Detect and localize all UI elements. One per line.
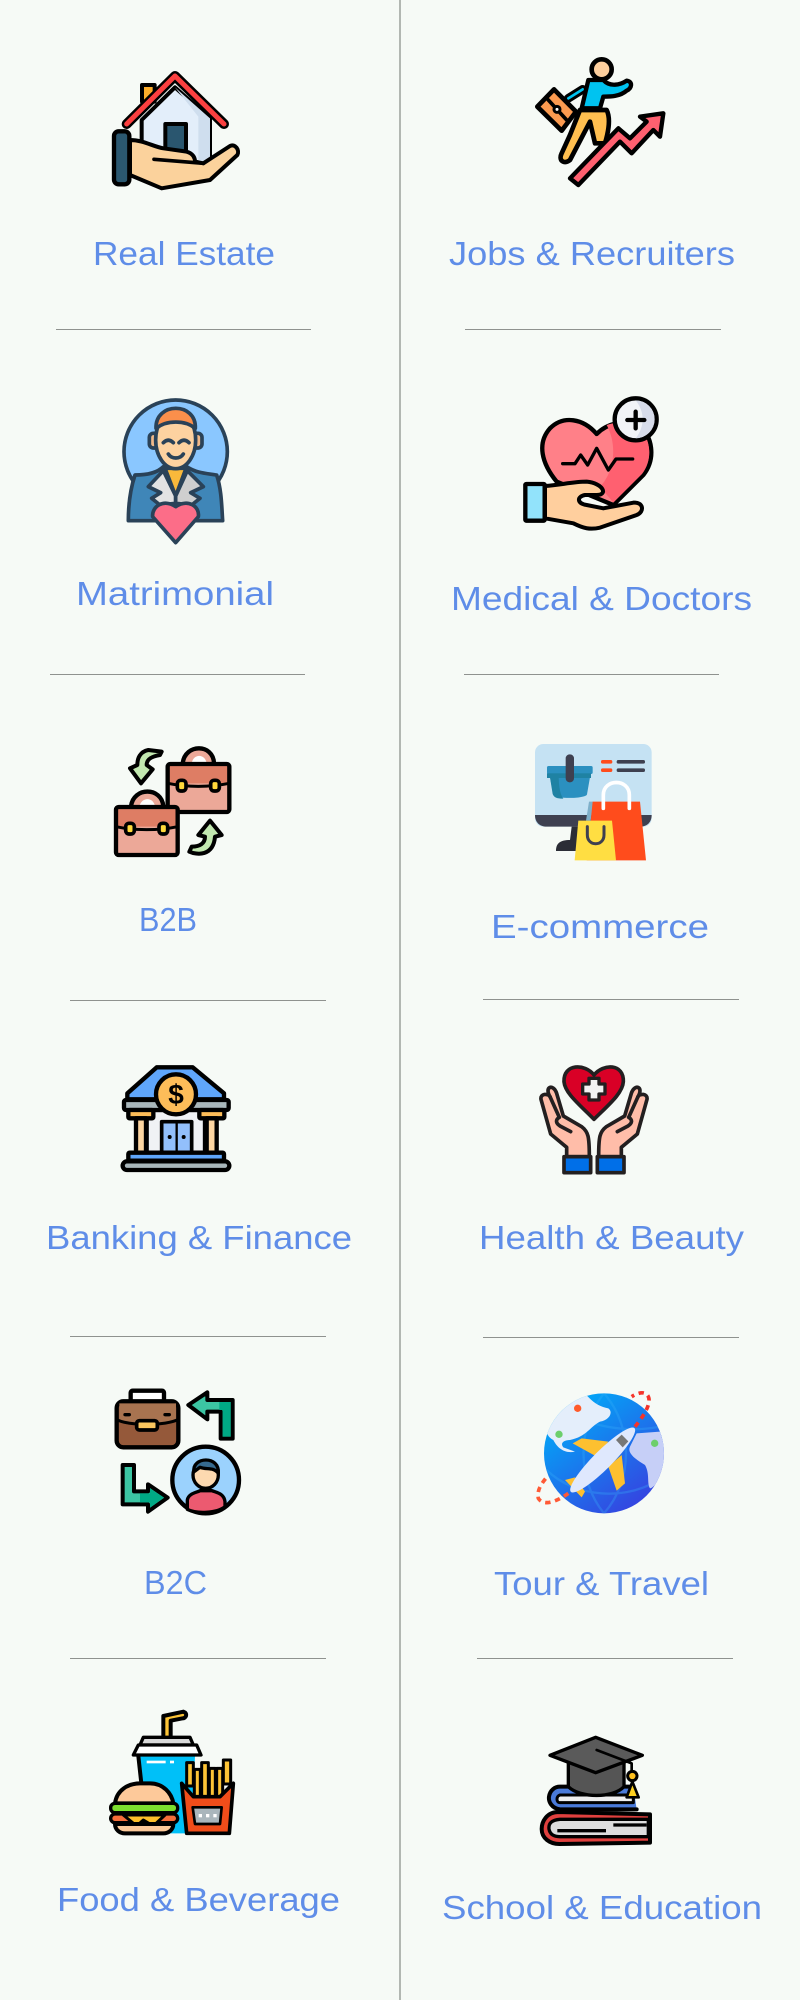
- icon: bank building with dollar coin: $: [168, 1079, 184, 1110]
- label: Health & Beauty: Health & Beauty: [479, 1219, 745, 1256]
- panel: Food & Beverage: [57, 1712, 340, 1918]
- panel: School & Education: [442, 1737, 762, 1926]
- label: Jobs & Recruiters: Jobs & Recruiters: [449, 235, 735, 272]
- panel: Tour & Travel: [494, 1393, 709, 1602]
- panel: B2B: [116, 748, 229, 938]
- panel: E-commerce: [491, 744, 709, 945]
- label: Real Estate: Real Estate: [93, 235, 275, 272]
- icon: groom with heart: [124, 400, 227, 543]
- label: B2C: B2C: [144, 1564, 207, 1601]
- icon: house held in hand: [114, 76, 238, 188]
- label: Medical & Doctors: Medical & Doctors: [451, 580, 752, 617]
- panel: Health & Beauty: [479, 1067, 745, 1256]
- label: Banking & Finance: Banking & Finance: [46, 1219, 352, 1256]
- icon: man climbing rising arrow: [537, 59, 663, 185]
- panel: Matrimonial: [76, 400, 274, 612]
- panel: Medical & Doctors: [451, 398, 752, 617]
- icon: hands holding heart: [541, 1067, 647, 1173]
- icon: burger, drink and fries: [111, 1712, 233, 1833]
- panel: Banking & Finance: [46, 1067, 352, 1256]
- icon: globe with airplane: [538, 1393, 667, 1513]
- icon: heart in hand with plus: [525, 398, 657, 529]
- label: School & Education: School & Education: [442, 1889, 762, 1926]
- label: B2B: B2B: [139, 901, 197, 938]
- icon: bank building with dollar coin: [123, 1067, 229, 1170]
- icon: graduation cap on books: [542, 1737, 650, 1844]
- icon: briefcase, arrows and customer: [117, 1391, 239, 1513]
- icon: two briefcases with arrows: [116, 748, 229, 855]
- panel: B2C: [117, 1391, 239, 1601]
- panel: Jobs & Recruiters: [449, 59, 735, 272]
- label: Matrimonial: Matrimonial: [76, 575, 274, 612]
- label: Food & Beverage: Food & Beverage: [57, 1881, 340, 1918]
- panel: Real Estate: [93, 76, 275, 272]
- label: Tour & Travel: Tour & Travel: [494, 1565, 709, 1602]
- label: E-commerce: E-commerce: [491, 908, 709, 945]
- icon: monitor with shopping bags: [535, 744, 652, 860]
